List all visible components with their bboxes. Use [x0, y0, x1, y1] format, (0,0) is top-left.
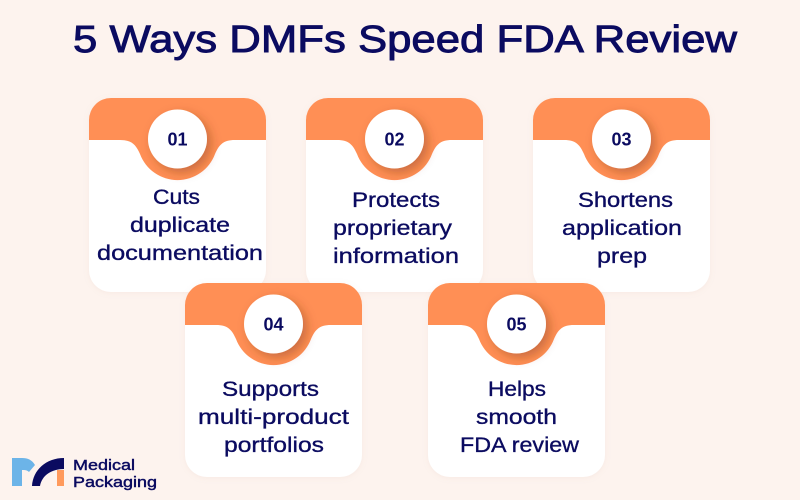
card 05 text [460, 377, 580, 457]
card 04 header [185, 283, 362, 365]
card 01 number badge: 01 [167, 130, 188, 150]
card 03 number badge: 03 [611, 130, 632, 150]
logo text: Packaging [73, 474, 157, 491]
logo text [73, 457, 157, 491]
card 01 text: Cuts [153, 185, 200, 209]
card 05 number badge: 05 [506, 314, 527, 334]
card 04 text: Supports [222, 377, 319, 401]
card 05 [428, 283, 605, 477]
card 05 text: smooth [476, 405, 557, 429]
card 02 header [306, 98, 483, 180]
card 03 header [533, 98, 710, 180]
card 05 header [428, 283, 605, 365]
card 05 number badge [487, 294, 546, 354]
card 01 text [97, 185, 263, 265]
card 04 text: multi-product [198, 405, 349, 429]
logo: Medical Packaging [12, 457, 157, 491]
title: 5 Ways DMFs Speed FDA Review [73, 19, 738, 61]
card 04 number badge [244, 294, 303, 354]
card 04 text [198, 377, 349, 457]
card 02 text: proprietary [333, 216, 452, 240]
card 01 text: duplicate [130, 213, 230, 237]
card 01 number badge [148, 110, 207, 168]
card 03 text: Shortens [578, 188, 673, 212]
card 01 header [89, 98, 266, 180]
card 02 number badge [365, 110, 424, 168]
card 02 text: information [333, 244, 459, 268]
card 03 [533, 98, 710, 292]
card 02 text: Protects [352, 188, 440, 212]
card 03 text [562, 188, 682, 268]
card 02 [306, 98, 483, 292]
card 05 text: FDA review [460, 433, 580, 457]
logo text: Medical [73, 457, 135, 474]
card 04 [185, 283, 362, 477]
card 01 [89, 98, 266, 292]
card 03 text: prep [597, 244, 647, 268]
logo icon [12, 458, 64, 486]
card 04 number badge: 04 [263, 314, 284, 334]
card 04 text: portfolios [224, 433, 324, 457]
card 03 number badge [592, 110, 651, 168]
card 01 text: documentation [97, 241, 263, 265]
card 02 text [333, 188, 459, 268]
card 02 number badge: 02 [384, 130, 405, 150]
card 05 text: Helps [488, 377, 546, 401]
card 03 text: application [562, 216, 682, 240]
